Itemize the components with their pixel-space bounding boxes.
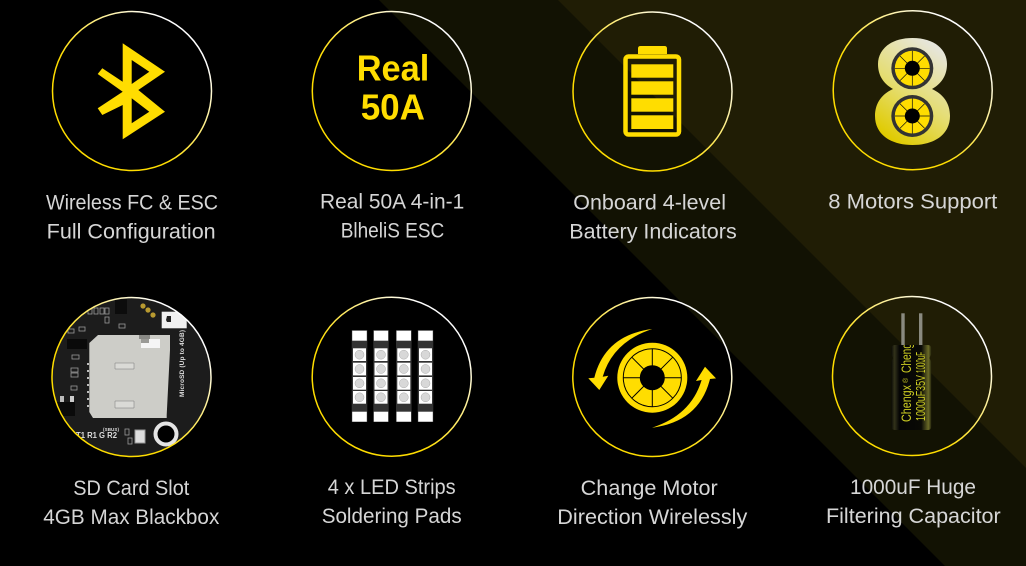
icon: capacitor: 1000uF <box>913 352 928 373</box>
board silkscreen text: T1 R1 G R2 <box>76 431 118 440</box>
arrow: counter-clockwise right <box>652 367 716 428</box>
heading text: BlheliS ESC <box>341 219 444 242</box>
heading text: 4GB Max Blackbox <box>43 506 220 529</box>
heading text <box>320 190 464 242</box>
white silkscreen label <box>162 312 187 328</box>
panel: LED strips <box>312 297 471 528</box>
photo: circuit board <box>50 296 214 460</box>
heading text: Filtering Capacitor <box>826 505 1001 528</box>
icon: figure 8 with motors <box>875 38 950 145</box>
heading text: 8 Motors Support <box>828 190 997 213</box>
heading text: Wireless FC & ESC <box>46 191 218 214</box>
icon: capacitor: ® <box>902 377 910 383</box>
heading text <box>826 476 1001 528</box>
circle outline <box>312 12 471 170</box>
gold pads <box>140 303 156 318</box>
background: dark diagonal band <box>379 0 1026 566</box>
panel: SD card slot <box>43 296 220 529</box>
circle outline <box>573 12 732 171</box>
heading text: Onboard 4-level <box>573 191 726 214</box>
icon: real 50A wordmark: 50A <box>361 86 425 127</box>
panel: 8 motors <box>828 11 997 213</box>
panel: battery indicators <box>569 12 737 243</box>
background: lighter diagonal band <box>558 0 1026 468</box>
circle outline <box>832 296 992 456</box>
heading text: 1000uF Huge <box>850 476 976 499</box>
panel: motor direction <box>557 298 748 529</box>
circle outline <box>52 298 211 456</box>
board silkscreen text: (SBUS) <box>103 427 120 432</box>
circle outline <box>573 298 732 456</box>
icon: capacitor <box>891 313 931 430</box>
heading text: Battery Indicators <box>569 220 737 243</box>
circle outline <box>833 11 992 170</box>
heading text <box>322 476 462 528</box>
icon: capacitor: 1000uF35V <box>913 375 928 421</box>
icon: capacitor: Chengx <box>898 385 914 422</box>
circle outline <box>52 12 212 170</box>
arrow: counter-clockwise left <box>588 329 652 390</box>
heading text: Direction Wirelessly <box>557 506 748 529</box>
icon: LED strip 3 <box>396 330 412 422</box>
icon: real 50A wordmark: Real <box>357 48 429 89</box>
icon: battery <box>626 46 679 134</box>
heading text: Full Configuration <box>47 220 216 243</box>
heading text <box>557 477 748 529</box>
icon: LED strip 4 <box>418 330 433 422</box>
panel: wireless configuration <box>46 12 218 243</box>
heading text: SD Card Slot <box>73 477 189 500</box>
white button <box>135 430 145 443</box>
panel: capacitor <box>826 296 1001 528</box>
mounting hole <box>156 424 176 444</box>
microSD card slot <box>87 335 170 418</box>
heading text: Real 50A 4-in-1 <box>320 190 464 213</box>
board silkscreen text <box>76 330 186 440</box>
board silkscreen text: MicroSD (Up to 4GB) <box>179 330 186 397</box>
heading text <box>43 477 220 529</box>
heading text: Soldering Pads <box>322 505 462 528</box>
icon: bluetooth <box>98 43 165 139</box>
icon: LED strip 1 <box>352 330 367 422</box>
circle outline <box>312 297 471 456</box>
heading text <box>46 191 218 243</box>
heading text: Change Motor <box>581 477 718 500</box>
heading text <box>569 191 737 243</box>
icon: motor wheel <box>617 343 687 413</box>
panel: real 50A ESC <box>312 12 471 242</box>
icon: real 50A wordmark <box>357 48 429 127</box>
icon: LED strip 2 <box>373 330 389 422</box>
icon: capacitor: Cheng <box>898 343 914 373</box>
heading text: 4 x LED Strips <box>328 476 456 499</box>
